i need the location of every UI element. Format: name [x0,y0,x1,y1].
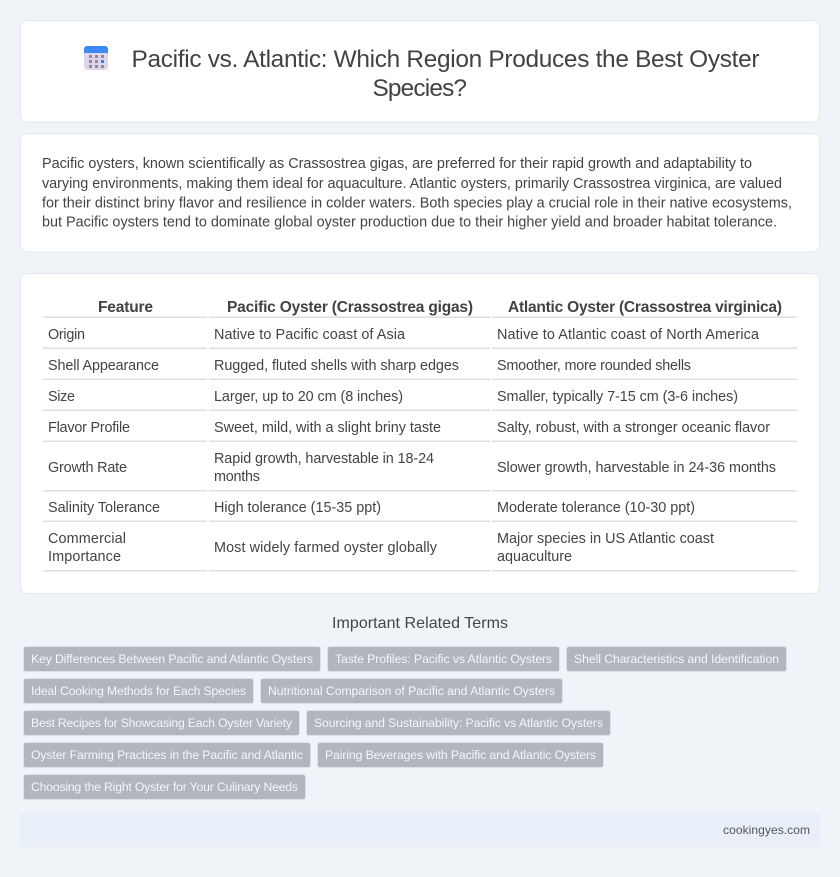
row: salinity tolerance [48,500,695,516]
tag [24,710,300,736]
icon: calendar [84,46,108,70]
intro text: Pacific oysters, known scientifically as Crassostrea gigas, are preferred for their rapid growth and adaptability to [42,156,752,172]
tag [24,742,310,768]
row: commercial importance: Importance [48,549,121,565]
row: commercial importance: Major species in US Atlantic coast [497,531,714,547]
related term tags [24,646,786,800]
tag [318,742,604,768]
tag [24,646,320,672]
table header: Pacific Oyster (Crassostrea gigas) [227,299,473,316]
row: growth rate [48,451,776,485]
tag [566,646,786,672]
row: salinity tolerance: High tolerance (15-35 ppt) [214,500,381,516]
table header [98,299,782,316]
row: flavor profile: Salty, robust, with a stronger oceanic flavor [497,420,770,436]
row: growth rate: Growth Rate [48,460,127,476]
row: flavor profile [48,420,770,436]
row: shell appearance [48,358,691,374]
tag: Choosing the Right Oyster for Your Culinary Needs [31,780,298,794]
row: origin [48,327,759,343]
tag [306,710,610,736]
row: salinity tolerance: Moderate tolerance (10-30 ppt) [497,500,695,516]
table header: Feature [98,299,153,316]
tag [24,678,254,704]
table header: Atlantic Oyster (Crassostrea virginica) [508,299,782,316]
intro text: varying environments, making them ideal for aquaculture. Atlantic oysters, primarily Crassostrea virginica, are valued [42,176,782,192]
row: size: Larger, up to 20 cm (8 inches) [214,389,403,405]
panel: intro paragraph [20,134,820,252]
row: shell appearance: Rugged, fluted shells with sharp edges [214,358,459,374]
row: origin: Origin [48,327,85,343]
row: origin: Native to Atlantic coast of North America [497,327,759,343]
footer source text: cookingyes.com [723,823,810,837]
heading: important related terms: Important Related Terms [332,615,508,632]
title panel [20,20,820,122]
row: shell appearance: Shell Appearance [48,358,159,374]
row: commercial importance: aquaculture [497,549,572,565]
row: growth rate: Rapid growth, harvestable in 18-24 [214,451,434,467]
row: size [48,389,738,405]
tag: Key Differences Between Pacific and Atlantic Oysters [31,652,313,666]
tag: Oyster Farming Practices in the Pacific and Atlantic [31,748,303,762]
row: salinity tolerance: Salinity Tolerance [48,500,160,516]
tag: Shell Characteristics and Identification [574,652,779,666]
row: size: Smaller, typically 7-15 cm (3-6 inches) [497,389,738,405]
tag [260,678,562,704]
row: commercial importance [48,531,714,565]
row: growth rate: Slower growth, harvestable in 24-36 months [497,460,776,476]
row: growth rate: months [214,469,260,485]
title: Species? [372,75,467,102]
tag: Taste Profiles: Pacific vs Atlantic Oysters [335,652,552,666]
row: origin: Native to Pacific coast of Asia [214,327,405,343]
title: Pacific vs. Atlantic: Which Region Produces the Best Oyster [132,46,760,73]
panel: comparison table [20,274,820,594]
tag: Best Recipes for Showcasing Each Oyster Variety [31,716,293,730]
tag: Nutritional Comparison of Pacific and Atlantic Oysters [268,684,555,698]
footer [20,813,820,847]
row: commercial importance: Most widely farmed oyster globally [214,540,438,556]
row: flavor profile: Sweet, mild, with a slight briny taste [214,420,441,436]
row: size: Size [48,389,75,405]
tag [24,774,306,800]
tag [328,646,560,672]
tag: Ideal Cooking Methods for Each Species [31,684,246,698]
row: commercial importance: Commercial [48,531,126,547]
row: flavor profile: Flavor Profile [48,420,130,436]
intro text: but Pacific oysters tend to dominate global oyster production due to their higher yield and broader habitat tolerance. [42,214,777,230]
tag: Pairing Beverages with Pacific and Atlantic Oysters [325,748,596,762]
row: shell appearance: Smoother, more rounded shells [497,358,691,374]
tag: Sourcing and Sustainability: Pacific vs Atlantic Oysters [314,716,603,730]
intro text: for their distinct briny flavor and resilience in colder waters. Both species play a crucial role in their native ecosystems, [42,196,792,212]
